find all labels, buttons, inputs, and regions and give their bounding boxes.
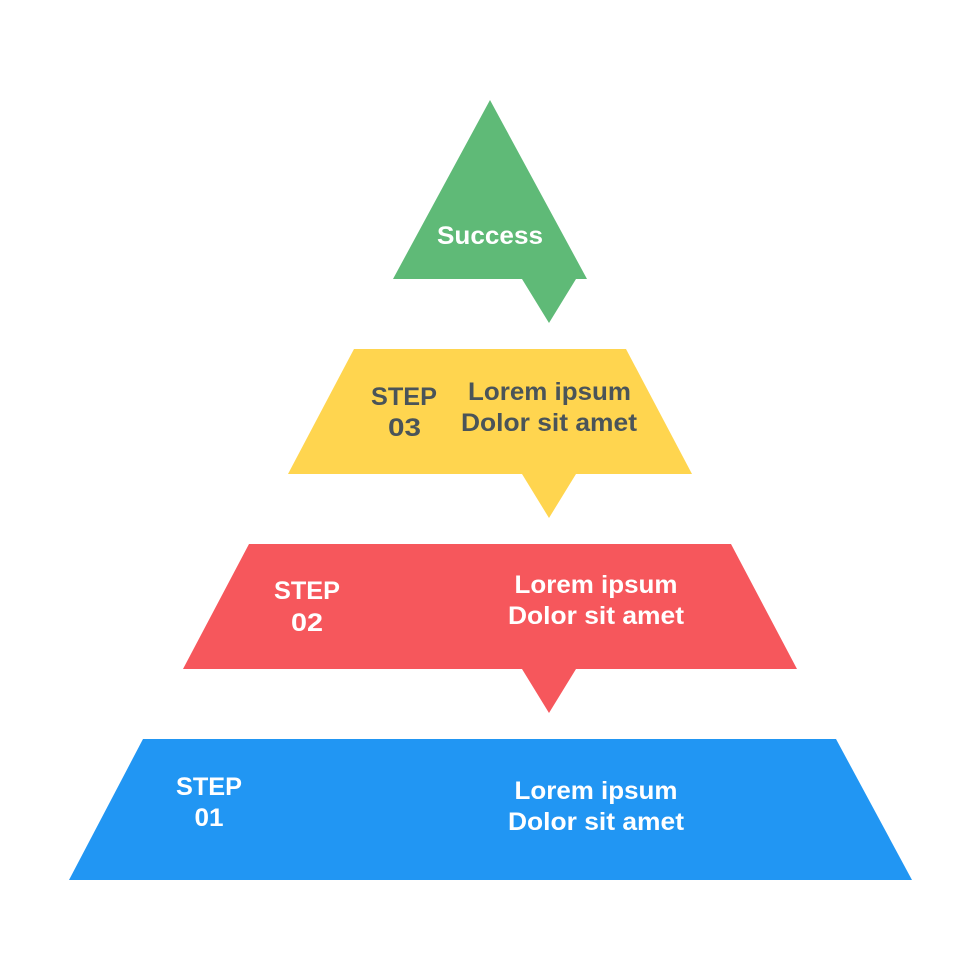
label: step 01 (176, 773, 242, 832)
label: success: Success (437, 222, 543, 250)
label: step 02: STEP (274, 577, 340, 605)
text: step 02 description (508, 571, 685, 630)
label: step 01: STEP (176, 773, 242, 801)
label: step 03 (371, 383, 437, 442)
tier: step 02 (red) (183, 544, 797, 713)
text: step 02 description: Dolor sit amet (508, 602, 685, 630)
tier: step 03 (yellow) (288, 349, 692, 518)
text: step 01 description: Dolor sit amet (508, 808, 685, 836)
label: step 03: 03 (388, 414, 421, 442)
label: step 02: 02 (291, 609, 323, 637)
tier: success (green) (393, 100, 587, 323)
text: step 02 description: Lorem ipsum (514, 571, 678, 599)
text: step 03 description: Lorem ipsum (468, 378, 631, 406)
label: step 02 (274, 577, 340, 637)
label: step 03: STEP (371, 383, 437, 411)
label: step 01: 01 (194, 804, 224, 832)
text: step 03 description (461, 378, 638, 437)
tier: step 01 (blue) (69, 739, 912, 880)
text: step 01 description (508, 777, 685, 836)
text: step 01 description: Lorem ipsum (514, 777, 678, 805)
text: step 03 description: Dolor sit amet (461, 409, 638, 437)
